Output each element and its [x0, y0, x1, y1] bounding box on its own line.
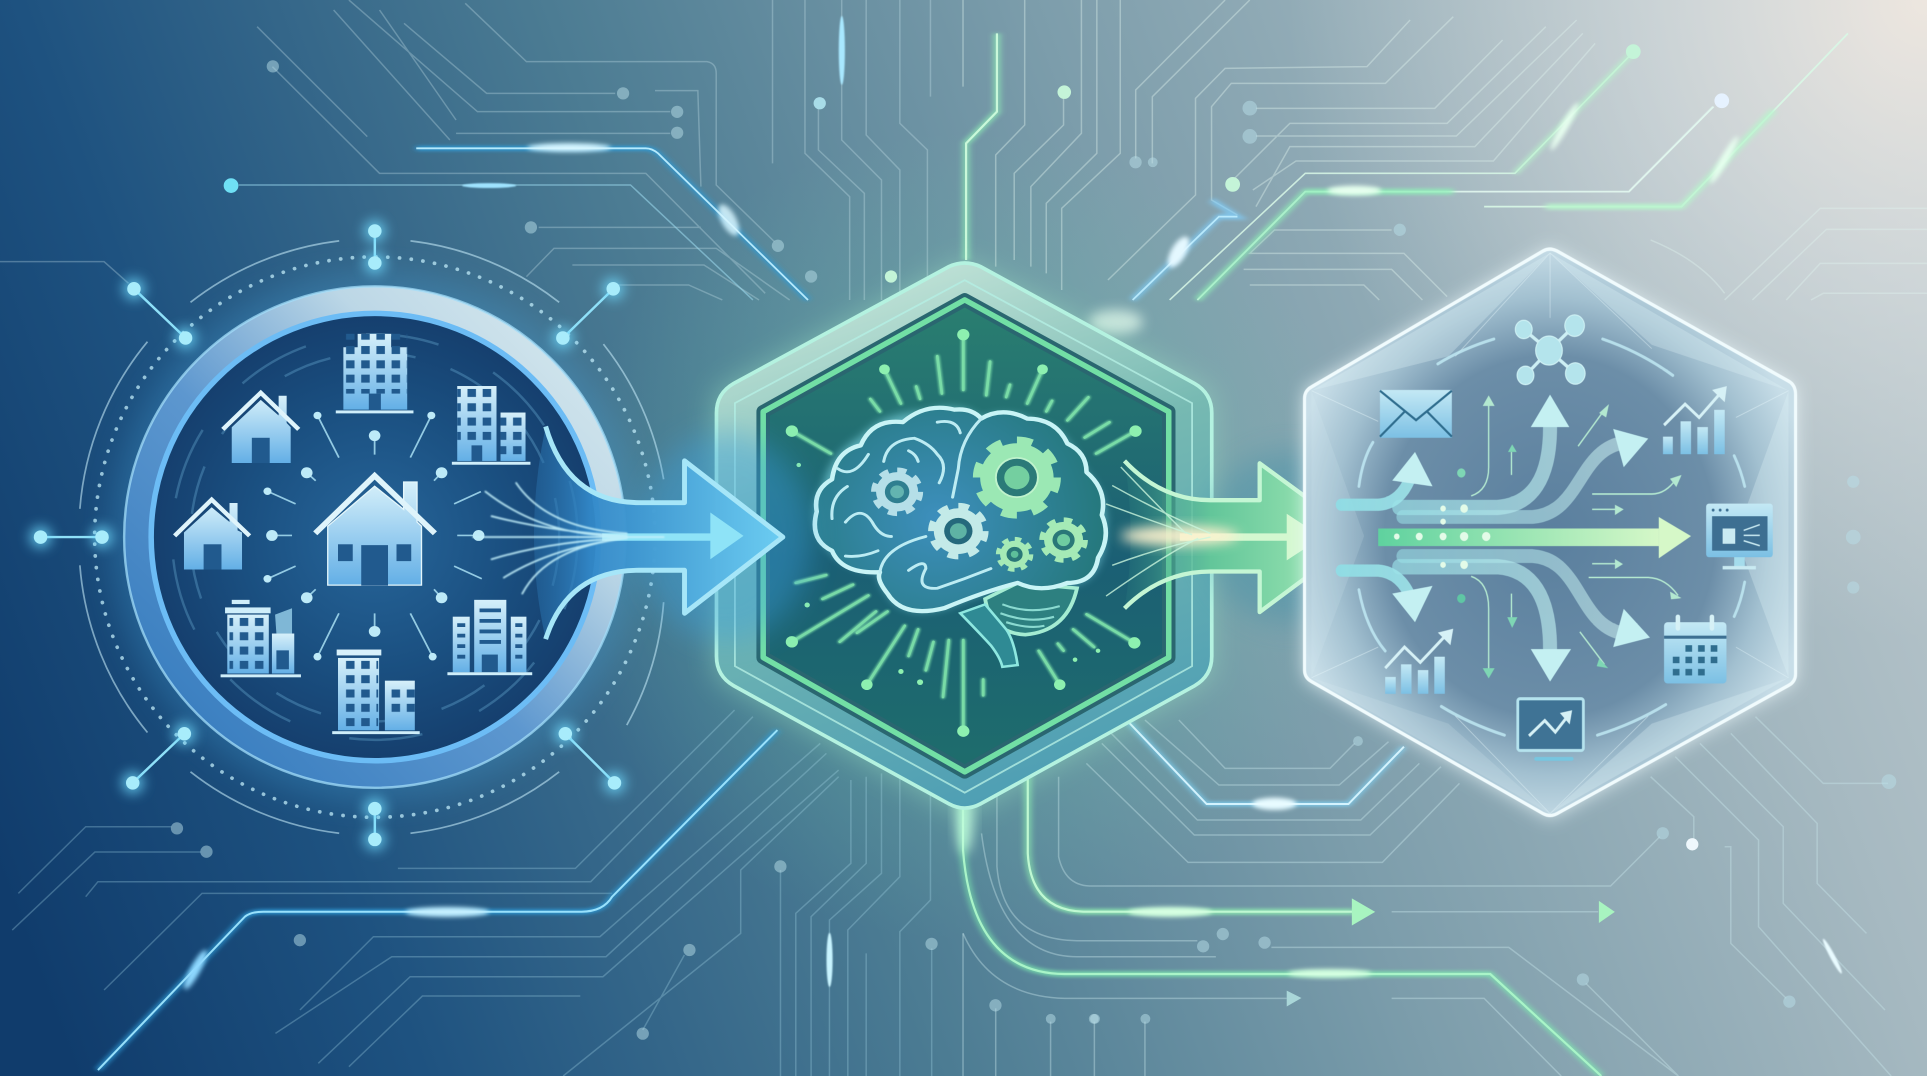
icon: office top right: [452, 386, 530, 465]
arrow body fading out of the disc: [534, 426, 783, 639]
hexagon inner outlines: [735, 280, 1192, 793]
energy wisps: [1106, 467, 1211, 596]
crystal facets: [1312, 253, 1789, 814]
swirl arcs inside disc: [172, 334, 578, 740]
panel: output crystal hexagon: [1305, 249, 1796, 817]
spoke node dots: [34, 224, 621, 846]
icon: office top: [336, 334, 413, 413]
brain glow: [815, 407, 1106, 611]
brain outline: [815, 408, 1106, 611]
thin secondary arrows: [1457, 395, 1682, 678]
flow arrows upward: [1341, 395, 1648, 517]
icon: bar chart upper right: [1663, 386, 1727, 454]
icon: office bottom: [332, 650, 420, 734]
brain folds: [832, 419, 991, 588]
arrow outline: [546, 426, 783, 639]
radiating connector lines: [267, 415, 482, 657]
circuit traces: top right: [963, 0, 1927, 300]
central flow arrow: [1378, 504, 1691, 569]
gear: right green: [1042, 520, 1085, 560]
icon: browser monitor: [1706, 504, 1773, 569]
connector dots: [263, 412, 484, 660]
icon: central house: [315, 476, 435, 586]
green glowing nodes: [224, 44, 1729, 283]
icon: network nodes: [1515, 315, 1585, 385]
icon: factory bottom left: [221, 600, 301, 677]
arrow body: [1124, 461, 1360, 612]
circuit traces: bottom left: [12, 710, 932, 1076]
radiating green rays: [792, 336, 1136, 731]
light flares on traces: [181, 16, 1844, 992]
icon: calendar: [1664, 615, 1726, 683]
crystal body: [1305, 249, 1796, 816]
spoke nodes around ring: [41, 231, 614, 839]
energy flare: [1121, 526, 1239, 546]
fiber streaks: [473, 483, 664, 594]
icon: house left: [175, 500, 250, 570]
icon: house top left: [223, 393, 299, 463]
arrow outline: [1124, 461, 1360, 612]
trace arrowheads: [1287, 898, 1615, 1007]
circuit traces: bottom right: [960, 700, 1891, 1076]
arrow inner chevron: [1180, 514, 1322, 560]
hexagon outer band: [716, 263, 1212, 808]
arrow: data to AI: [473, 426, 811, 642]
decorative outer arcs: [80, 241, 664, 833]
panel: input property circle: [29, 220, 664, 850]
arrow inner chevron: [602, 512, 744, 559]
icon: office bottom right: [447, 600, 532, 675]
node glows: [29, 220, 626, 850]
icon: envelope: [1380, 390, 1452, 438]
gear: large green: [978, 441, 1056, 514]
ray end dots: [786, 329, 1142, 737]
gear: center: [932, 506, 985, 556]
crystal rim: [1305, 249, 1796, 816]
arrow: AI to outputs: [1106, 451, 1376, 623]
panel: central AI hexagon: [716, 262, 1212, 814]
circuit traces: top left: [0, 0, 930, 300]
gear: small green: [998, 539, 1031, 570]
input ring: [124, 286, 626, 788]
dotted ring: [95, 257, 655, 817]
flow arrows downward: [1341, 556, 1650, 682]
input icons: homes and buildings: [175, 334, 532, 734]
cerebellum and stem: [960, 583, 1077, 667]
crystal inner arc: [1359, 339, 1745, 735]
icon: bar chart lower left: [1385, 629, 1453, 694]
hexagon core: [763, 300, 1169, 772]
brain with gears and rays: [786, 329, 1142, 737]
icon: trend monitor: [1518, 699, 1583, 761]
gear: left blue: [874, 470, 920, 513]
